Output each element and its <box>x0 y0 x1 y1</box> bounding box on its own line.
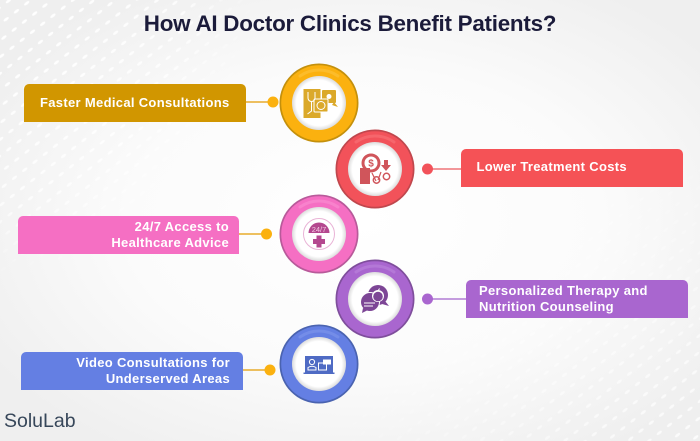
ring: 24/7 access <box>280 194 358 274</box>
connector: lower costs <box>422 164 461 174</box>
label: lower treatment costs <box>460 149 682 186</box>
connector: personalized therapy <box>422 294 467 304</box>
logo: SoluLab: SoluLab <box>4 410 76 432</box>
label: faster medical consultations <box>24 84 246 122</box>
title: How AI Doctor Clinics Benefit Patients? <box>144 11 556 36</box>
label: 24/7 access: 24/7 Access to <box>135 219 229 234</box>
icon: stethoscope tablet <box>304 89 338 118</box>
connector: 24/7 access <box>239 228 272 240</box>
ring: faster consultations <box>280 64 358 142</box>
icon: nutrition chat bubbles <box>360 285 389 313</box>
connector: faster consultations <box>245 96 278 108</box>
label: personalized therapy <box>466 280 688 318</box>
label: lower treatment costs: Lower Treatment Costs <box>476 159 627 174</box>
icon: coin with down arrow: $ <box>368 158 374 170</box>
ring: video consultations <box>280 324 358 404</box>
icon: 24/7 medical clock: 24/7 <box>312 225 326 234</box>
ring: lower costs <box>336 130 414 208</box>
label: faster medical consultations: Faster Medical Consultations <box>40 95 230 110</box>
icon: laptop video call <box>304 356 334 374</box>
label: video consultations: Video Consultations for <box>76 355 230 370</box>
label: video consultations: Underserved Areas <box>106 371 230 386</box>
connector: video consultations <box>243 364 276 376</box>
label: personalized therapy: Personalized Therapy and <box>479 283 648 298</box>
label: personalized therapy: Nutrition Counseling <box>479 299 614 314</box>
ring: personalized therapy <box>336 260 414 338</box>
label: 24/7 access: Healthcare Advice <box>111 235 229 250</box>
label: video consultations <box>21 352 243 390</box>
label: 24/7 access <box>18 216 239 254</box>
